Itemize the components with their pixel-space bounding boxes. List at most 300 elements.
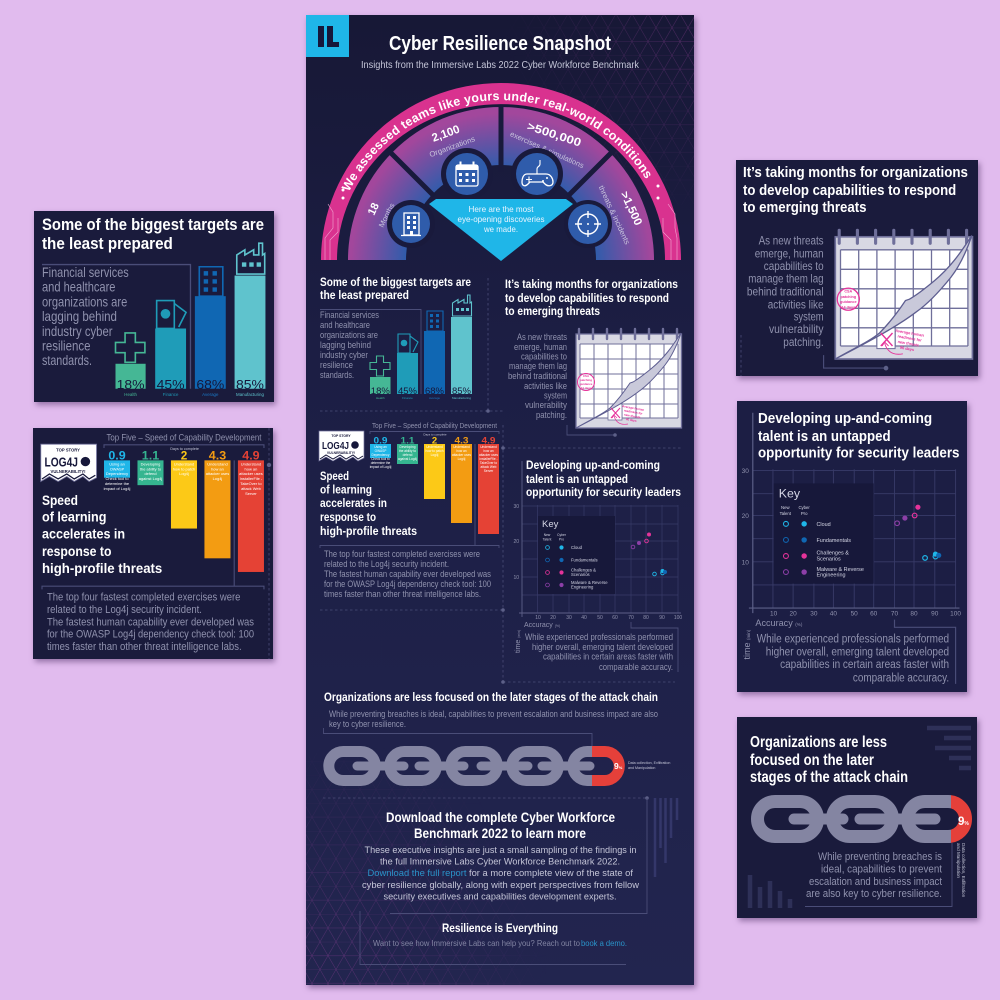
text block (320, 310, 379, 380)
bar chart: days to complete: Understand (453, 445, 470, 449)
scatter chart: 10 (535, 615, 541, 621)
bar chart: days to complete: attack Web (481, 465, 497, 469)
sector label: 1,500 threats: >1,500 (618, 190, 644, 228)
card: attack chain (737, 717, 977, 918)
calendar chart: CSA (583, 374, 590, 378)
heading: It’s taking months for organizations (505, 279, 678, 291)
card text (747, 234, 824, 349)
card bar chart: 4.9 (242, 450, 260, 463)
text block (324, 549, 491, 599)
card text: capabilities to (764, 259, 824, 273)
card bar chart: how an (245, 466, 257, 471)
calendar chart: 14 days (581, 386, 592, 390)
bar chart: days to complete: 4.9 (482, 436, 496, 446)
legend: Engineering (571, 584, 594, 590)
card scatter chart: time (min) (742, 629, 752, 659)
card bar chart: Developing (141, 461, 160, 466)
card bar chart: impact of Log4j (104, 486, 131, 491)
legend: Pro (559, 538, 564, 542)
badge: Log4j top story: VULNERABILITY! (327, 451, 355, 455)
sectors (348, 105, 654, 260)
card heading: It’s taking months for organizations (743, 164, 968, 181)
call to action: download: Download the full report (368, 868, 467, 879)
call to action: download: Download the complete Cyber Workforce (386, 810, 615, 825)
callout: discoveries triangle: eye-opening discoveries (458, 214, 544, 224)
card bar chart: 45% (157, 377, 185, 392)
bar chart: days to complete: Developing (400, 445, 416, 449)
card bar chart: InstallerFile - (240, 476, 263, 481)
card calendar chart: CSA (844, 290, 853, 294)
text block: The top four fastest completed exercises were (324, 549, 480, 559)
text block: capabilities in certain areas faster with (543, 652, 673, 662)
badge: Log4j top story: LOG4J (322, 440, 349, 452)
callout: discoveries triangle (429, 199, 573, 261)
card bar chart: against Log4j (139, 476, 162, 481)
heading: Some of the biggest targets are (320, 277, 471, 289)
sector label: 18 months: Months (377, 201, 397, 229)
bar chart: days to complete: the ability to (399, 449, 416, 453)
legend: Cloud (571, 545, 583, 550)
card legend: Scenarios (816, 557, 841, 562)
bar chart: days to complete: 1.1 (400, 436, 415, 446)
text block: vulnerability (525, 400, 567, 410)
card text: While preventing breaches is (818, 851, 942, 863)
card scatter chart: 10 (770, 611, 778, 618)
closing call to action: Resilience is Everything (442, 923, 558, 935)
card calendar chart: readiness for (897, 333, 923, 343)
text block: behind traditional (508, 371, 567, 381)
card calendar chart: new threats (897, 339, 919, 348)
card calendar chart: Average human (895, 328, 925, 338)
card heading (42, 493, 162, 577)
legend: Talent (543, 538, 551, 542)
card bar chart: how an (211, 466, 224, 471)
card text: lagging behind (42, 309, 117, 324)
card badge: LOG4J (44, 455, 78, 470)
card bar chart: Understand (174, 461, 194, 466)
bar chart: Health (376, 396, 385, 400)
card scatter chart: 60 (870, 611, 878, 618)
card text: manage them lag (748, 271, 824, 285)
sector label: 18 months: 18 (366, 201, 382, 217)
card heading: talent is an untapped (758, 429, 891, 445)
card: up-and-coming talent (737, 401, 967, 692)
bar chart (370, 295, 472, 400)
card heading (750, 734, 908, 786)
card calendar chart: 96 days (900, 345, 915, 352)
text block (329, 709, 658, 729)
card legend: Key (779, 487, 801, 501)
card legend: Fundamentals (816, 538, 851, 544)
card text: activities like (768, 297, 824, 311)
text block: capabilities to (521, 352, 567, 362)
card text: organizations are (42, 294, 127, 309)
card bar chart: 1.1 (142, 450, 160, 463)
scatter chart: time (min) (515, 630, 522, 653)
text block: organizations are (320, 330, 378, 340)
calendar chart: Average human (622, 404, 645, 412)
heading: to emerging threats (505, 306, 600, 318)
card bar chart: Average (202, 392, 219, 397)
sector label: 2,100 organizations (428, 124, 476, 159)
scatter chart: 60 (612, 615, 618, 621)
text block: related to the Log4j security incident. (324, 559, 449, 569)
closing call to action (373, 923, 627, 948)
title: Cyber Resilience Snapshot (389, 33, 611, 55)
text block: emerge, human (514, 342, 567, 352)
call to action: download (362, 810, 639, 902)
card legend (774, 483, 874, 584)
calendar chart: patching (580, 378, 592, 382)
card text: ideal, capabilities to prevent (821, 864, 942, 876)
legend: Challenges & (571, 568, 596, 572)
scatter chart (513, 461, 682, 653)
bar chart: Average (429, 396, 440, 400)
call to action: download: the full Immersive Labs Cyber Workforce Benchmark 2022. (380, 856, 620, 868)
card bar chart: OWASP (110, 466, 125, 471)
card text (757, 632, 949, 684)
card calendar chart: patching (840, 295, 857, 299)
text block (525, 632, 673, 672)
calendar chart: new threats (624, 413, 641, 419)
card text: related to the Log4j security incident. (47, 604, 202, 616)
card text: Financial services (42, 265, 129, 280)
heading: to develop capabilities to respond (505, 293, 669, 305)
card bar chart: Understand (207, 461, 228, 466)
icon: target (564, 200, 612, 248)
sector label: 2,100 organizations: Organizations (428, 134, 476, 159)
card heading: Organizations are less (750, 734, 887, 751)
text block: comparable accuracy. (599, 662, 673, 672)
card bar chart: Manufacturing (236, 392, 265, 397)
scatter chart: 20 (550, 615, 556, 621)
card: speed of learning (33, 428, 273, 659)
card heading: high-profile threats (42, 561, 162, 577)
bar chart: days to complete: 0.9 (374, 436, 388, 446)
card bar chart: attack Web (241, 486, 262, 491)
text block (508, 332, 567, 420)
text block: times faster than other threat intelligence labs. (324, 589, 481, 599)
card scatter chart: 30 (742, 468, 749, 475)
bar chart: days to complete: attacker uses (479, 453, 498, 457)
bar chart: days to complete: attacker uses (452, 453, 471, 457)
chain label: and Manipulation (628, 766, 655, 770)
call to action: download: These executive insights are just a small sampling of the findings in (364, 845, 636, 856)
card bar chart: Check tool to (105, 476, 129, 481)
card bar chart: attacker uses (239, 471, 263, 476)
sector label: 18 months (366, 201, 397, 229)
card legend: New (781, 505, 791, 510)
card bar chart: 68% (196, 377, 225, 392)
bar chart: 45% (398, 386, 417, 396)
text block: While preventing breaches is ideal, capabilities to prevent escalation and business impact are also (329, 709, 658, 719)
pink arch band: We assessed teams like yours under real-world conditions (341, 92, 650, 190)
bar chart: days to complete: against Log4j (398, 457, 417, 461)
card: months to develop (736, 160, 978, 376)
card text: The top four fastest completed exercises were (47, 591, 240, 603)
card scatter chart: Accuracy (%) (755, 618, 803, 628)
chain label: Data collection, Exfiltration (628, 761, 670, 765)
bar chart: days to complete: Log4j (431, 453, 439, 457)
badge: Log4j top story: TOP STORY (331, 434, 351, 438)
call to action: download: for a more complete view of the state of (469, 868, 633, 879)
text block: for the OWASP Log4j dependency check tool: 100 (324, 579, 491, 589)
card chart title: Top Five – Speed of Capability Development (106, 433, 262, 443)
icon: calendar (441, 148, 493, 200)
heading: Developing up-and-coming (526, 460, 660, 472)
card: biggest targets (34, 211, 274, 402)
text block: higher overall, emerging talent developed (532, 642, 673, 652)
calendar chart: guidance (580, 382, 593, 386)
card bar chart (115, 243, 265, 397)
card text: and healthcare (42, 280, 115, 295)
text block: standards. (320, 370, 354, 380)
card heading: focused on the later (750, 752, 874, 769)
sector label: 500,000 exercises: exercises & simulations (509, 129, 586, 170)
scatter chart: 30 (566, 615, 572, 621)
card chain graphic: 9% (958, 816, 969, 828)
card bar chart: the ability to (140, 466, 162, 471)
bar chart: days to complete: how an (456, 449, 467, 453)
text block: Financial services (320, 310, 379, 320)
card heading: Speed (42, 493, 78, 509)
card heading: accelerates in (42, 526, 125, 542)
card badge: VULNERABILITY! (51, 469, 86, 474)
section: speed of learning: Days to complete (423, 432, 447, 436)
section: biggest targets (320, 277, 472, 400)
bar chart: 85% (452, 386, 471, 396)
section: speed of learning (319, 421, 499, 599)
card text: As new threats (759, 234, 824, 248)
text block: The fastest human capability ever developed was (324, 569, 491, 579)
scatter chart: 50 (597, 615, 603, 621)
heading (505, 279, 678, 318)
card heading (42, 215, 264, 253)
card legend: Talent (780, 511, 792, 516)
bar chart: days to complete: TakeOver to (480, 461, 497, 465)
callout: discoveries triangle: we made. (483, 224, 518, 234)
calendar chart: 96 days (625, 417, 637, 423)
card bar chart: Finance (163, 392, 179, 397)
card scatter chart: 90 (931, 611, 939, 618)
card text (47, 591, 254, 653)
bar chart: days to complete: how to patch (425, 449, 444, 453)
bar chart: days to complete: determine the (371, 461, 390, 465)
card scatter chart: 70 (891, 611, 899, 618)
text block: As new threats (517, 332, 567, 342)
pink arch band (321, 83, 681, 260)
sector label: 1,500 threats: threats & incidents (597, 184, 632, 246)
sector label: 1,500 threats (597, 184, 644, 246)
legend: Key (542, 519, 559, 530)
card text (42, 265, 129, 368)
subtitle: Insights from the Immersive Labs 2022 Cyber Workforce Benchmark (361, 60, 640, 71)
card text: While experienced professionals performed (757, 632, 949, 646)
card heading: stages of the attack chain (750, 769, 908, 786)
card bar chart: Log4j (179, 471, 189, 476)
card bar chart: 18% (117, 377, 145, 392)
card badge: TOP STORY (56, 448, 80, 453)
card scatter chart: 40 (830, 611, 837, 618)
bar chart: days to complete: Using an (374, 445, 387, 449)
card bar chart: 0.9 (108, 450, 126, 463)
card legend: Challenges & (816, 551, 849, 557)
card bar chart: Dependency (106, 471, 128, 476)
card heading: Some of the biggest targets are (42, 215, 264, 234)
card heading (743, 164, 968, 216)
card legend: Engineering (816, 573, 846, 579)
legend (538, 516, 615, 594)
card: speed of learning: Days to complete (170, 447, 199, 451)
card calendar chart: 14 days (841, 305, 855, 309)
card scatter chart: 20 (789, 611, 797, 618)
card heading: to emerging threats (743, 199, 866, 216)
card bar chart: 2 (181, 450, 188, 463)
bar chart: days to complete: how an (483, 449, 494, 453)
bar chart: days to complete: Understand (480, 445, 497, 449)
arch graphic (321, 83, 681, 261)
card text: escalation and business impact (809, 876, 942, 888)
heading: accelerates in (320, 498, 387, 510)
text block: and healthcare (320, 320, 370, 330)
bar chart: Finance (402, 396, 413, 400)
text block: resilience (320, 360, 353, 370)
text block: patching. (536, 410, 567, 420)
card bar chart: Using an (109, 461, 125, 466)
panel: main infographic (304, 14, 700, 992)
card heading: the least prepared (42, 234, 173, 253)
card text: patching. (783, 335, 824, 349)
bar chart: days to complete: defend (403, 453, 413, 457)
heading: high-profile threats (320, 526, 417, 538)
bar chart: days to complete: impact of Log4j (370, 465, 392, 469)
heading: Speed (320, 471, 349, 483)
card text: resilience (42, 339, 91, 354)
section: up-and-coming talent (513, 460, 682, 672)
chain graphic: 9% (614, 761, 623, 771)
card bar chart: Understand (241, 461, 261, 466)
bar chart: days to complete: 2 (432, 436, 437, 446)
card scatter chart: 10 (742, 559, 749, 566)
card bar chart: Health (124, 392, 138, 397)
badge: Log4j top story (319, 431, 364, 461)
card text: for the OWASP Log4j dependency check tool: 100 (47, 629, 254, 641)
heading (320, 277, 471, 302)
card text: higher overall, emerging talent developed (766, 645, 949, 659)
card text: capabilities in certain areas faster with (780, 657, 949, 671)
card text: behind traditional (747, 284, 824, 298)
heading: opportunity for security leaders (526, 487, 681, 499)
logo (306, 15, 349, 57)
card text: industry cyber (42, 324, 113, 339)
text block: lagging behind (320, 340, 371, 350)
call to action: download: security executives and capabilities development experts. (384, 892, 616, 902)
card chain label (956, 843, 966, 898)
bar chart: 18% (371, 386, 390, 396)
card scatter chart: 80 (910, 611, 918, 618)
card bar chart: 4.3 (209, 450, 227, 463)
callout: discoveries triangle: Here are the most (468, 204, 534, 214)
heading: Organizations are less focused on the later stages of the attack chain (324, 692, 658, 704)
heading: of learning (320, 484, 372, 496)
card legend: Malware & Reverse (816, 567, 864, 573)
scatter chart: Accuracy (%) (524, 622, 560, 629)
scatter chart: 70 (628, 615, 634, 621)
chain graphic (329, 752, 623, 780)
card bar chart (104, 450, 264, 572)
card chain graphic (758, 802, 969, 836)
text block: While experienced professionals performed (525, 632, 673, 642)
text block: industry cyber (320, 350, 368, 360)
scatter chart: 30 (513, 504, 519, 510)
scatter chart: 90 (659, 615, 665, 621)
card legend: Pro (801, 511, 808, 516)
section: months to develop (505, 279, 682, 437)
card bar chart: defend (144, 471, 157, 476)
bar chart: days to complete: Dependency (372, 453, 390, 457)
heading (320, 471, 417, 538)
card text: are also key to cyber resilience. (806, 888, 942, 900)
scatter chart: 80 (643, 615, 649, 621)
bar chart: days to complete: 4.3 (454, 436, 468, 446)
chart title: Top Five – Speed of Capability Development (372, 421, 498, 430)
section: attack chain (324, 692, 670, 780)
scatter chart: 40 (581, 615, 587, 621)
card scatter chart: 100 (950, 611, 961, 618)
legend: Scenarios (571, 572, 590, 577)
card chain label: Data collection, Exfiltration (961, 843, 966, 898)
bar chart: days to complete: OWASP (375, 449, 386, 453)
card calendar chart (835, 230, 972, 359)
legend: Cyber (557, 533, 567, 537)
closing call to action: Want to see how Immersive Labs can help you? Reach out to (373, 939, 581, 948)
bar chart: Manufacturing (452, 396, 471, 400)
card text (806, 851, 942, 900)
bar chart: days to complete: InstallerFile - (479, 457, 498, 461)
heading (526, 460, 681, 499)
bar chart: days to complete: Log4j (458, 457, 466, 461)
bar chart: days to complete: Check tool to (371, 457, 390, 461)
card badge (41, 444, 97, 481)
legend: Malware & Reverse (571, 580, 608, 585)
card text: times faster than other threat intelligence labs. (47, 641, 242, 653)
card bar chart: determine the (105, 481, 130, 486)
sector label: 500,000 exercises: >500,000 (525, 121, 582, 150)
icon: game controller (511, 148, 563, 200)
card heading: Developing up-and-coming (758, 411, 932, 427)
closing call to action: book a demo. (581, 939, 627, 948)
card legend: Cloud (816, 522, 831, 528)
card chain label: and Manipulation (956, 843, 961, 878)
legend: New (544, 533, 551, 537)
bar chart: days to complete: Understand (426, 445, 443, 449)
call to action: download: cyber resilience globally, along with expert perspectives from fellow (362, 880, 639, 891)
card bar chart: Log4j (213, 476, 222, 481)
scatter chart: 10 (513, 575, 519, 581)
card scatter chart: 20 (742, 513, 749, 520)
card text: standards. (42, 353, 92, 368)
heading: the least prepared (320, 290, 409, 302)
card text: The fastest human capability ever developed was (47, 616, 254, 628)
card bar chart: attacker uses (206, 471, 229, 476)
icon: building (387, 200, 435, 248)
legend: Fundamentals (571, 558, 598, 562)
call to action: download: Benchmark 2022 to learn more (414, 826, 586, 841)
card heading: opportunity for security leaders (758, 446, 959, 462)
card text: system (794, 310, 824, 324)
card heading: to develop capabilities to respond (743, 182, 956, 199)
card calendar chart: guidance (840, 300, 857, 304)
